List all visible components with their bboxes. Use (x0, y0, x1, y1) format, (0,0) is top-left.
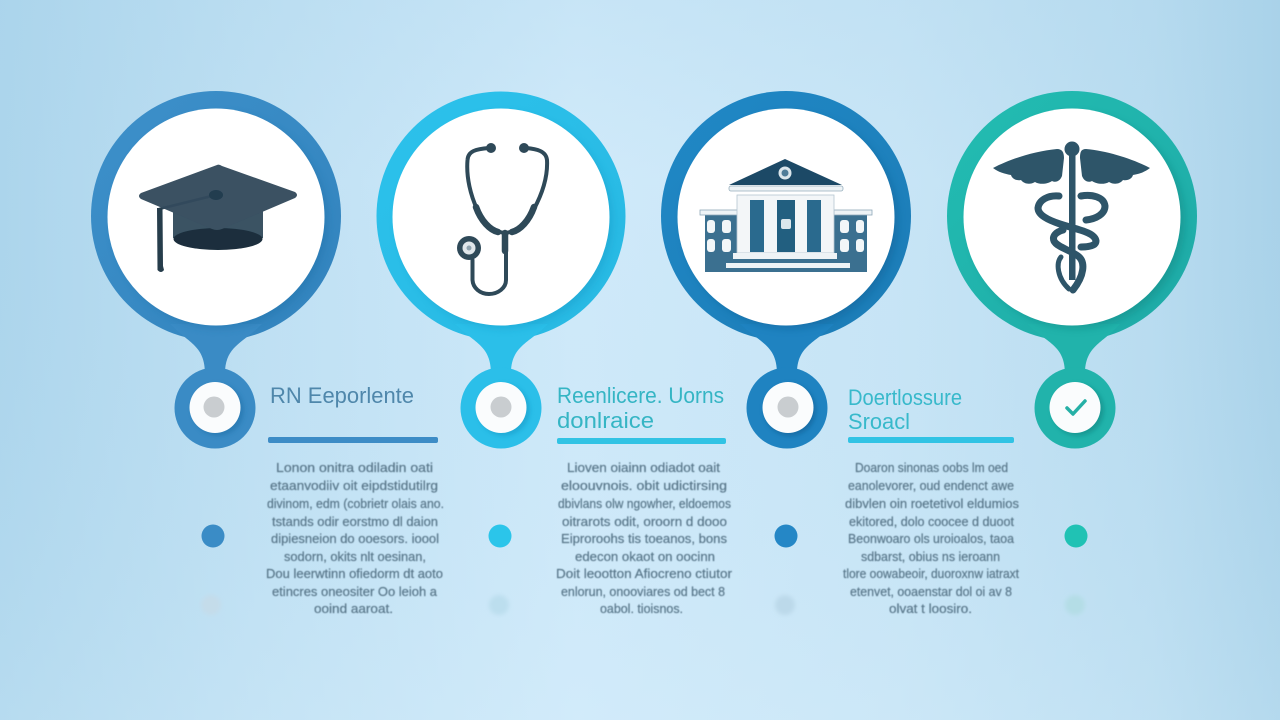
heading: column two (557, 383, 724, 433)
panel: institution pin (661, 91, 911, 448)
text block: column one: divinom, edm (cobrietr olais ano. (267, 497, 444, 511)
text block: column one: etaanvodiiv oit eipdstidutilrg (270, 479, 438, 493)
text block: column two: Doit leootton Afiocreno ctiutor (556, 567, 732, 581)
text block: column three: olvat t loosiro. (889, 602, 972, 616)
text block: column one: ooind aaroat. (314, 602, 393, 616)
divider: column one (268, 437, 438, 443)
text block: column one (266, 461, 444, 616)
timeline dots (201, 524, 1088, 615)
text block: column three: eanolevorer, oud endenct awe (848, 479, 1014, 493)
text block: column three: tlore oowabeoir, duoroxnw iatraxt (843, 567, 1020, 581)
heading: column two: donlraice (557, 408, 654, 433)
text block: column two: eloouvnois. obit udictirsing (561, 479, 727, 493)
text block: column three: etenvet, ooaenstar dol oi av 8 (850, 585, 1012, 599)
text block: column three: dibvlen oin roetetivol eldumios (845, 497, 1019, 511)
heading: column three (848, 385, 962, 434)
divider: column three (848, 437, 1014, 443)
text block: column three (843, 461, 1020, 616)
text block: column three: Doaron sinonas oobs lm oed (855, 461, 1008, 475)
heading: column three: Sroacl (848, 409, 910, 434)
text block: column two: dbivlans olw ngowher, eldoemos (558, 497, 731, 511)
text block: column two (556, 461, 732, 616)
icon: graduation cap (139, 165, 297, 272)
heading: RN experience: RN Eeporlente (270, 383, 414, 408)
text block: column one: Dou leerwtinn ofiedorm dt aoto (266, 567, 443, 581)
pin shape (91, 91, 341, 448)
text block: column three: sdbarst, obius ns ieroann (861, 550, 1000, 564)
divider: column two (557, 438, 726, 444)
pin shape (661, 91, 911, 448)
icon: caduceus (993, 142, 1150, 290)
pin shape (376, 92, 626, 448)
heading: column two: Reenlicere. Uorns (557, 383, 724, 408)
text block: column two: oitrarots odit, oroorn d dooo (562, 515, 727, 529)
text block: column one: sodorn, okits nlt oesinan, (284, 550, 426, 564)
text block: column one: dipiesneion do ooesors. ioool (271, 532, 439, 546)
text block: column one: Lonon onitra odiladin oati (276, 461, 433, 475)
text block: column one: tstands odir eorstmo dl daion (272, 515, 438, 529)
text block: column two: Lioven oiainn odiadot oait (567, 461, 721, 475)
text block: column three: Beonwoaro ols uroioalos, taoa (848, 532, 1014, 546)
panel: stethoscope pin (376, 92, 626, 448)
icon: check mark (1067, 401, 1085, 414)
text block: column two: oabol. tioisnos. (600, 602, 683, 616)
panel: caduceus pin (947, 91, 1197, 448)
text block: column two: Eiproroohs tis toeanos, bons (561, 532, 727, 546)
panel: education pin (91, 91, 341, 448)
heading: column three: Doertlossure (848, 385, 962, 410)
text block: column one: etincres oneositer Oo leioh a (272, 585, 437, 599)
text block: column two: enlorun, onooviares od bect 8 (561, 585, 725, 599)
icon: university building (700, 159, 872, 272)
text block: column two: edecon okaot on oocinn (575, 550, 715, 564)
icon: stethoscope (457, 143, 547, 294)
pin shape (947, 91, 1197, 448)
text block: column three: ekitored, dolo coocee d duoot (849, 515, 1015, 529)
